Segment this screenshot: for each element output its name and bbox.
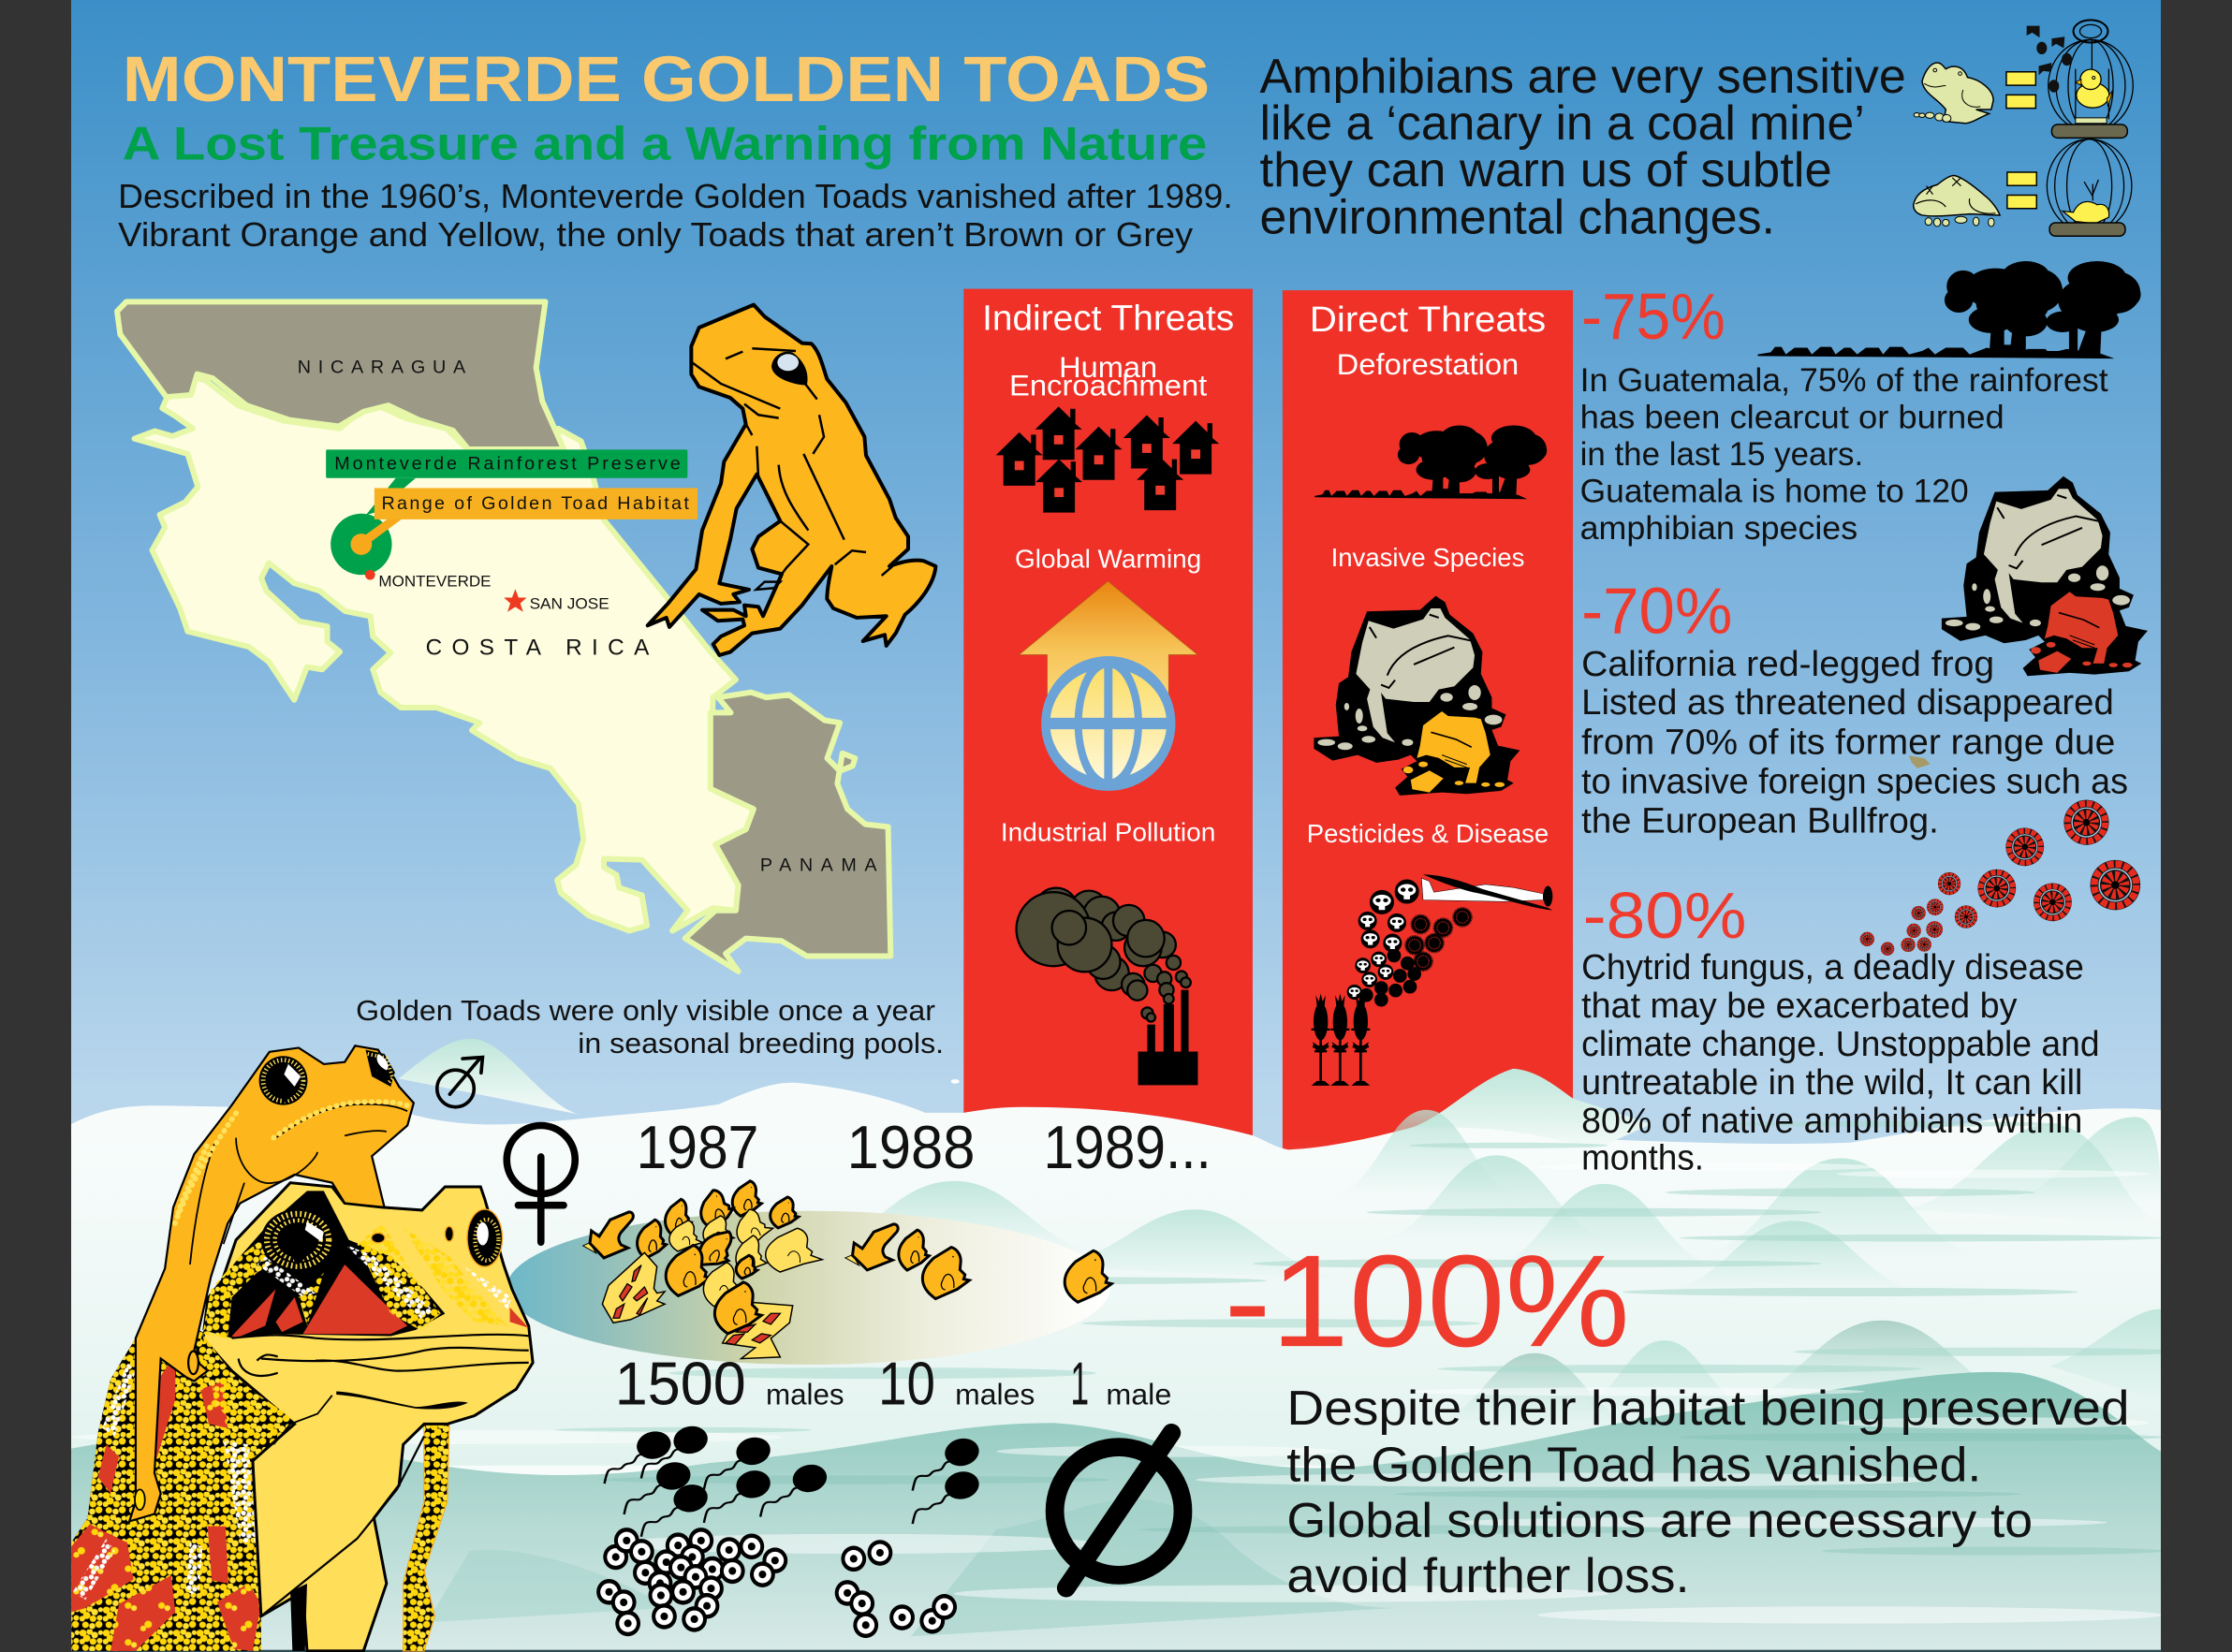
- statistic: -75%: -75%: [1581, 280, 1725, 353]
- illustration: mating golden toads: [71, 1045, 533, 1651]
- conclusion text: the Golden Toad has vanished.: [1286, 1438, 1981, 1492]
- years row: [637, 1113, 1211, 1181]
- text: Guatemala: has been clearcut or burned: [1580, 400, 2004, 436]
- icon: bullfrog eating golden toad: [1314, 596, 1520, 796]
- male counts: males: [955, 1377, 1035, 1411]
- 1988 toads: [845, 1224, 969, 1299]
- Panama: [685, 693, 890, 972]
- years row: 1988: [847, 1113, 975, 1181]
- statistic: -70%: -70%: [1581, 575, 1732, 648]
- Nicaragua: [117, 301, 564, 449]
- caption: breeding pools: Golden Toads were only visible once a year: [356, 995, 935, 1027]
- male counts: 1: [1070, 1349, 1089, 1417]
- icon: bullfrog eating red-legged frog: [1942, 476, 2148, 676]
- title: MONTEVERDE GOLDEN TOADS: [123, 44, 1210, 115]
- text: chytrid fungus: untreatable in the wild, It can kill: [1581, 1063, 2082, 1103]
- map of Costa Rica: [117, 301, 890, 972]
- icon: forest in banner: [1314, 426, 1547, 499]
- banner text: indirect threats: Encroachment: [1009, 369, 1207, 402]
- banner text: direct threats: [1307, 300, 1549, 848]
- female toad back: [71, 1297, 449, 1651]
- icon: male and female symbols: [437, 1058, 575, 1242]
- illustration: golden toad: [648, 305, 935, 655]
- banner text: indirect threats: Global Warming: [1015, 545, 1201, 574]
- male counts: 1500: [615, 1349, 746, 1417]
- male toad: [129, 1045, 414, 1521]
- map labels: SAN JOSE: [530, 595, 609, 613]
- text: California red-legged frog: to invasive foreign species such as: [1581, 763, 2128, 802]
- text: California red-legged frog: Listed as threatened disappeared: [1581, 683, 2114, 723]
- banner text: direct threats: Deforestation: [1337, 347, 1519, 381]
- map labels: NICARAGUA: [298, 357, 466, 377]
- 1988 sperm and eggs: [835, 1433, 986, 1638]
- conclusion text: [1286, 1381, 2130, 1602]
- Costa Rica land: [135, 377, 754, 930]
- 1987 toad crowd: [583, 1181, 822, 1359]
- subtitle: A Lost Treasure and a Warning from Nature: [123, 117, 1207, 169]
- conclusion text: Global solutions are necessary to: [1286, 1493, 2033, 1547]
- icon: frog and canary comparison: [1914, 20, 2133, 236]
- 1989 toad: [1065, 1250, 1111, 1302]
- text: chytrid fungus: Chytrid fungus, a deadly disease: [1581, 948, 2084, 987]
- text: California red-legged frog: [1581, 645, 2128, 841]
- text: California red-legged frog: from 70% of its former range due: [1581, 724, 2115, 763]
- text: chytrid fungus: that may be exacerbated by: [1581, 987, 2017, 1026]
- pool ellipse: [507, 1211, 1110, 1365]
- text: California red-legged frog: the European Bullfrog.: [1581, 801, 1939, 841]
- text: Guatemala: In Guatemala, 75% of the rainforest: [1580, 362, 2108, 399]
- banner text: indirect threats: Industrial Pollution: [1001, 817, 1215, 846]
- red-bellied toads: [602, 1252, 793, 1359]
- habitat label: Range of Golden Toad Habitat: [381, 493, 689, 514]
- map labels: [298, 357, 877, 875]
- text: California red-legged frog: California red-legged frog: [1581, 645, 1994, 684]
- 1987 sperm and eggs: [596, 1421, 833, 1636]
- preserve label: Monteverde Rainforest Preserve: [334, 454, 681, 475]
- text: chytrid fungus: climate change. Unstoppable and: [1581, 1025, 2100, 1064]
- icon: null symbol: [1055, 1433, 1182, 1588]
- icon: global warming arrow and globe: [1020, 581, 1197, 786]
- intro text: Vibrant Orange and Yellow, the only Toads that aren’t Brown or Grey: [118, 215, 1194, 254]
- snow and water landscape: [71, 1039, 2192, 1652]
- indirect threats banner: [963, 289, 1253, 1143]
- canary text: like a ‘canary in a coal mine’: [1260, 95, 1865, 150]
- text: chytrid fungus: months.: [1581, 1139, 1704, 1178]
- intro text: Described in the 1960’s, Monteverde Golden Toads vanished after 1989.: [118, 177, 1233, 215]
- map labels: COSTA RICA: [426, 635, 650, 660]
- banner text: direct threats: Pesticides & Disease: [1307, 819, 1549, 848]
- map labels: MONTEVERDE: [378, 572, 492, 590]
- icon: houses: [996, 406, 1219, 513]
- icon: clearcut forest: [1757, 261, 2141, 358]
- banner text: indirect threats: Human: [1059, 350, 1157, 384]
- banner text: direct threats: Invasive Species: [1331, 543, 1524, 572]
- icon: pollution factory: [1017, 888, 1197, 1085]
- male counts: male: [1106, 1377, 1171, 1411]
- male counts: [615, 1349, 1171, 1417]
- text: Guatemala: Guatemala is home to 120: [1580, 474, 1969, 510]
- canary text: Amphibians are very sensitive: [1260, 49, 1906, 103]
- canary text: they can warn us of subtle: [1260, 142, 1832, 197]
- text: chytrid fungus: 80% of native amphibians within: [1581, 1102, 2082, 1141]
- male counts: 10: [878, 1349, 935, 1417]
- habitat label: [374, 488, 698, 519]
- map labels: PANAMA: [760, 855, 877, 875]
- icon: pesticide plane: [1312, 874, 1552, 1086]
- statistic: -100%: -100%: [1225, 1227, 1630, 1374]
- sperm and eggs icons: [596, 1421, 986, 1638]
- conclusion text: avoid further loss.: [1286, 1548, 1690, 1602]
- text: Guatemala: [1580, 362, 2108, 547]
- statistic: -80%: -80%: [1583, 879, 1747, 952]
- text: Guatemala: amphibian species: [1580, 510, 1858, 547]
- direct threats banner: [1283, 290, 1573, 1158]
- male counts: males: [766, 1377, 844, 1411]
- toad population groups: [583, 1181, 1111, 1359]
- years row: 1987: [637, 1113, 758, 1181]
- text: Guatemala: in the last 15 years.: [1580, 436, 1863, 473]
- preserve label: [326, 449, 687, 478]
- canary text: [1260, 49, 1906, 243]
- small map fragment: [1909, 755, 1931, 768]
- years row: 1989...: [1043, 1113, 1211, 1181]
- preserve marker: [330, 478, 527, 612]
- canary text: environmental changes.: [1260, 189, 1775, 243]
- banner text: indirect threats: [982, 300, 1234, 846]
- banner text: direct threats: Direct Threats: [1310, 300, 1546, 340]
- text: chytrid fungus: [1581, 948, 2100, 1178]
- caption: breeding pools: [356, 995, 944, 1060]
- conclusion text: Despite their habitat being preserved: [1286, 1381, 2130, 1435]
- banner text: indirect threats: Indirect Threats: [982, 300, 1234, 339]
- intro text: [118, 177, 1233, 254]
- female toad head and chest: [202, 1183, 533, 1651]
- icon: chytrid fungus spores: [1860, 800, 2140, 956]
- caption: breeding pools: in seasonal breeding pools.: [578, 1028, 944, 1060]
